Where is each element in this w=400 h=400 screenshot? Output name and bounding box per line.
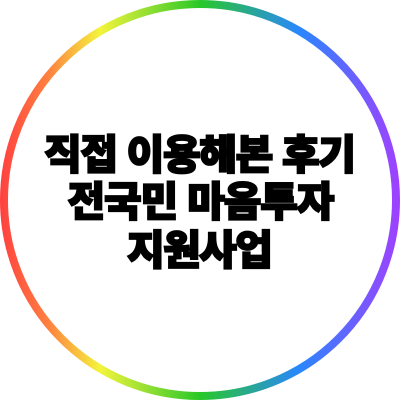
title line 2: 전국민 마음투자 — [68, 179, 335, 225]
title line 1: 직접 이용해본 후기 — [44, 132, 356, 178]
title — [44, 132, 356, 274]
title line 3: 지원사업 — [127, 228, 273, 274]
